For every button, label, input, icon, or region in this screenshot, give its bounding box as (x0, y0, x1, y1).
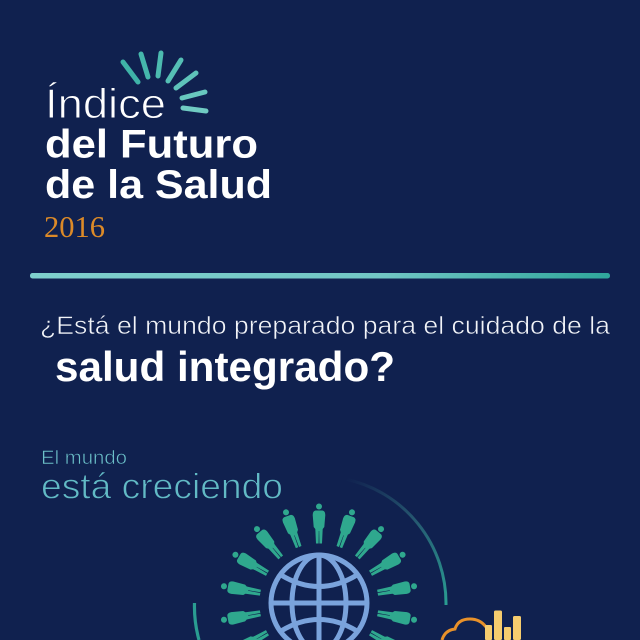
title line: del Futuro: del Futuro (45, 122, 258, 166)
arc right (345, 479, 446, 605)
question line 2: salud integrado? (55, 343, 395, 390)
title (45, 80, 272, 207)
icon: cloud (442, 619, 486, 640)
icon: globe (271, 555, 367, 640)
title line: de la Salud: de la Salud (45, 163, 272, 207)
icon: ring of people (220, 504, 418, 640)
section subheading: El mundo (41, 448, 127, 469)
icon: sunburst (123, 53, 206, 111)
question line 1: ¿Está el mundo preparado para el cuidado de la (40, 312, 610, 340)
divider rule (30, 273, 610, 278)
icon: bar chart (485, 610, 521, 640)
year: 2016 (44, 209, 105, 244)
section heading: está creciendo (41, 466, 283, 506)
arc left (194, 603, 199, 640)
title line: Índice: Índice (45, 80, 166, 127)
